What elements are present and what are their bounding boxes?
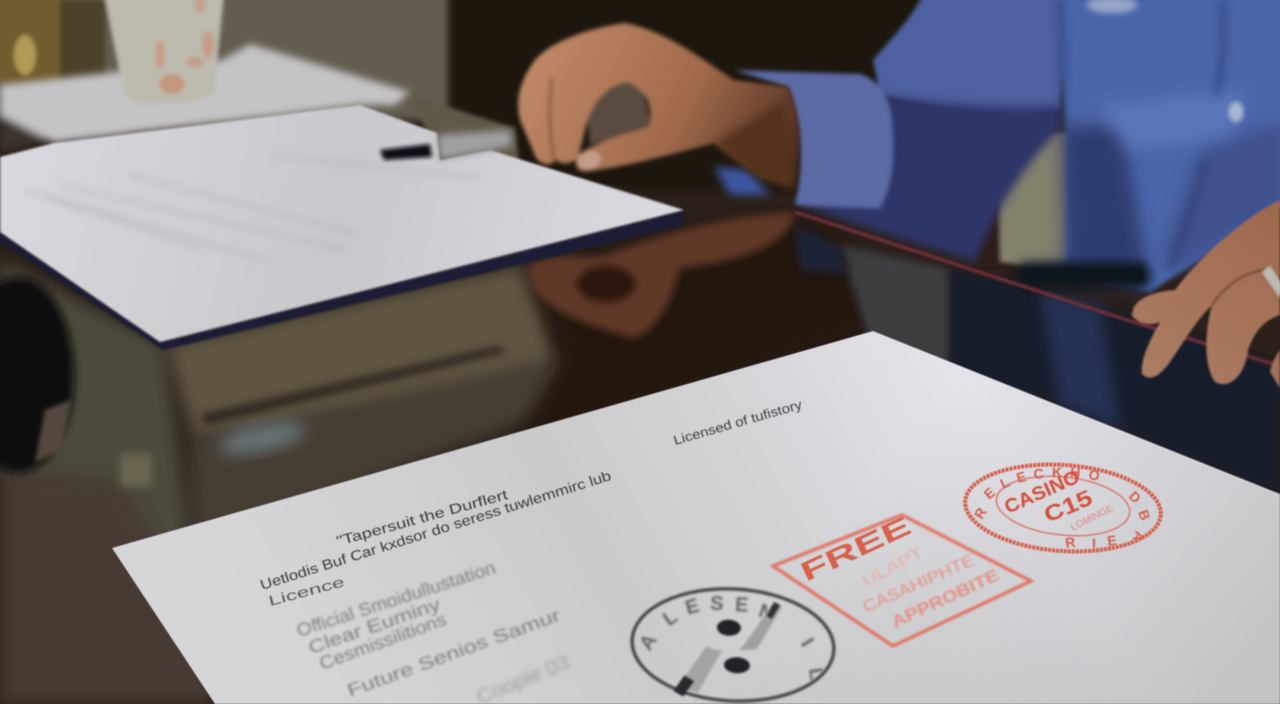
red cord (795, 212, 1280, 366)
gap between arm and torso (997, 133, 1066, 270)
red round stamp CASINO: O (1087, 466, 1101, 484)
document sheet (0, 105, 684, 342)
red square stamp FREE (773, 510, 1031, 646)
black round stamp: E (683, 595, 702, 619)
blue-grey blob (216, 416, 308, 460)
heading text (258, 467, 613, 609)
red round stamp CASINO: E (981, 484, 998, 502)
collar highlight (1087, 0, 1137, 13)
red square stamp FREE: FREE (796, 510, 915, 587)
red round stamp CASINO: K (1052, 464, 1062, 480)
black round stamp: L (659, 606, 682, 631)
blurred body text: Official Smoidullustation (294, 558, 498, 641)
black round stamp: I (796, 635, 818, 651)
black round stamp: E (735, 594, 749, 617)
red round stamp CASINO: C (1033, 465, 1044, 482)
red round stamp CASINO: LOMINGE (1069, 503, 1116, 534)
black round stamp: S (710, 593, 724, 615)
gap between finger and thumb (585, 80, 652, 145)
red round stamp CASINO: A (1130, 529, 1148, 544)
right hand with ring (1132, 200, 1280, 388)
dark chair blob (0, 277, 74, 473)
red round stamp CASINO: E (1015, 468, 1028, 486)
black round stamp: A (635, 630, 662, 654)
red square stamp FREE: ULAPT (860, 544, 926, 591)
red round stamp CASINO: CASINO (1001, 467, 1083, 519)
red round stamp CASINO: H (1070, 464, 1081, 481)
red round stamp CASINO: E (1106, 532, 1118, 549)
red round stamp CASINO: I (1092, 535, 1096, 551)
blurred body text: Cesmissilitions (317, 609, 449, 674)
table reflection of hand (527, 212, 795, 338)
red square stamp FREE: CASAHIPHTE (860, 550, 977, 617)
shirt folds (1060, 0, 1223, 270)
heading text: Uetlodis Buf Car kxdsor do seress tuwlemmirc lub (258, 467, 613, 593)
licence caption: Licensed of tufistory (672, 397, 804, 448)
black round stamp: L (804, 666, 828, 682)
black round stamp: N (756, 600, 777, 625)
paper sheet (112, 331, 1280, 704)
heading text: Licence (267, 573, 346, 609)
front licence document (112, 331, 1280, 704)
red round stamp CASINO (962, 458, 1164, 558)
dark glass reflections (520, 215, 1280, 495)
torso (1020, 0, 1280, 292)
red square stamp FREE: APPROBITE (889, 565, 1002, 632)
blurred body text: Future Senios Samur (345, 605, 563, 701)
pen (380, 130, 512, 160)
blurred document lines (25, 155, 480, 262)
paper cup (104, 0, 224, 104)
document spine edge (0, 210, 684, 350)
sleeve shadow side (800, 95, 1060, 262)
gold lamp reflections (0, 0, 105, 83)
shirt button (1229, 102, 1243, 122)
red round stamp CASINO: R (971, 505, 990, 522)
cuff (734, 70, 893, 208)
table left column (0, 260, 190, 560)
red round stamp CASINO: C15 (1040, 485, 1096, 528)
red round stamp CASINO: R (1064, 534, 1076, 551)
upper sleeve (873, 0, 1062, 114)
heading text: "Tapersuit the Durflert (335, 486, 509, 549)
left hand holding pen (518, 23, 800, 188)
table olive band (165, 265, 560, 440)
back paper (0, 44, 410, 152)
red round stamp CASINO: L (998, 473, 1012, 492)
left document on the table (0, 105, 684, 350)
red round stamp CASINO: B (1135, 508, 1154, 523)
red round stamp CASINO: D (1126, 488, 1144, 506)
blurred body text: Clear Euminy (306, 594, 443, 658)
black round stamp (629, 584, 837, 704)
blurred body text (294, 558, 563, 701)
shirt (714, 0, 1280, 292)
back wall, beige and dark (0, 0, 450, 120)
